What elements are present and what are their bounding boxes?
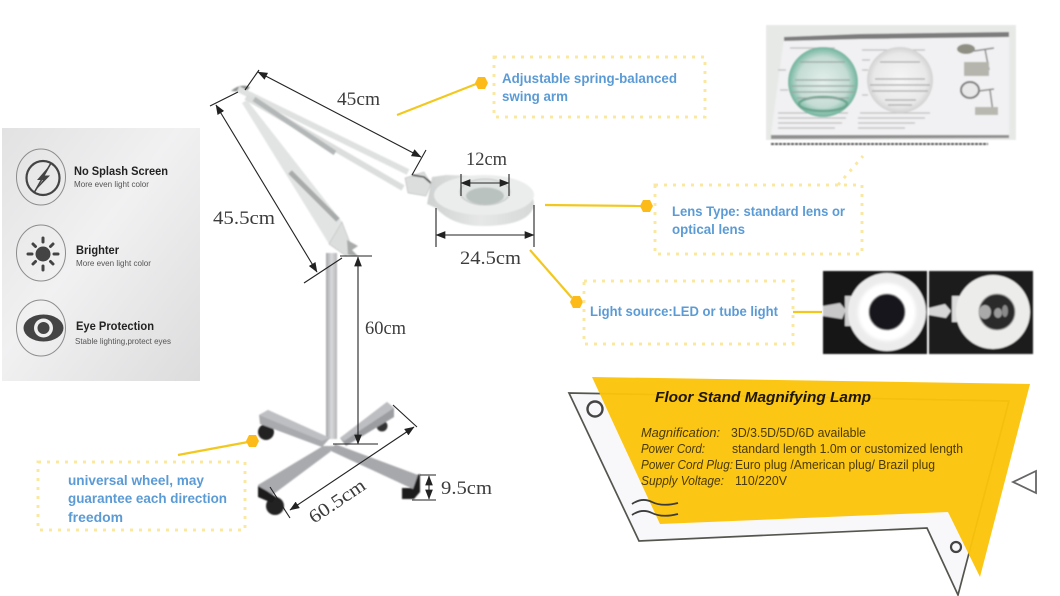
dimension: 45.5cm [210, 92, 342, 283]
manual thumbnails [957, 44, 998, 115]
dimension: 60.5cm [270, 405, 417, 528]
dimension: 45cm: 45cm [337, 89, 380, 110]
dimension: 60cm [333, 256, 406, 444]
spec list: 3D/3.5D/5D/6D available [731, 426, 866, 440]
feature: eye protection: Stable lighting,protect eyes [75, 336, 171, 346]
spec list: Power Cord Plug: [641, 458, 733, 472]
dimension: 9.5cm: 9.5cm [441, 478, 492, 499]
callout: universal wheel: universal wheel, may [68, 472, 204, 488]
callout: universal wheel: guarantee each direction [68, 490, 227, 506]
spec list: Euro plug /American plug/ Brazil plug [735, 458, 935, 472]
cross base with wheels [258, 402, 420, 515]
feature: no splash screen: More even light color [74, 179, 149, 189]
callout: swing arm: swing arm [502, 88, 568, 104]
callout: lens type: optical lens [672, 221, 745, 237]
callout: lens type [545, 156, 863, 254]
dimension: 12cm [461, 149, 509, 196]
photo: LED and tube light [823, 271, 1033, 354]
callout: light source [530, 250, 822, 344]
callout: lens type: Lens Type: standard lens or [672, 203, 846, 219]
photo: lens manual comparison [766, 25, 1016, 144]
feature: brighter: More even light color [76, 258, 151, 268]
dimension: 60.5cm: 60.5cm [305, 475, 370, 528]
spec list: Supply Voltage: [641, 474, 724, 488]
spec list: 110/220V [735, 474, 788, 488]
panel: product specs [569, 377, 1036, 595]
feature: brighter [16, 225, 151, 281]
dimension: 60cm: 60cm [365, 318, 406, 339]
callout: swing arm [397, 57, 705, 117]
feature: no splash screen: No Splash Screen [74, 166, 168, 178]
dimension: 45.5cm: 45.5cm [213, 208, 275, 229]
magnifier ring head [427, 175, 534, 226]
spec list: Power Cord: [641, 442, 705, 456]
callout: universal wheel [38, 435, 259, 530]
dimension: 9.5cm [412, 475, 492, 500]
feature: no splash screen [16, 149, 168, 205]
lamp arms [231, 86, 432, 256]
spec list: standard length 1.0m or customized length [732, 442, 963, 456]
feature: brighter: Brighter [76, 245, 119, 257]
feature: eye protection [16, 300, 171, 356]
spec list: Magnification: [641, 426, 720, 440]
callout: swing arm: Adjustable spring-balanced [502, 70, 677, 86]
floor stand lamp illustration [231, 86, 534, 515]
dimension: 24.5cm [436, 205, 534, 269]
dimension: 45cm [245, 70, 426, 175]
panel: lamp features [2, 128, 200, 381]
spec list [641, 426, 963, 488]
specs title: Floor Stand Magnifying Lamp [655, 389, 871, 406]
callout: universal wheel: freedom [68, 509, 123, 525]
pole [326, 253, 337, 439]
feature: eye protection: Eye Protection [76, 321, 154, 333]
callout: light source: Light source:LED or tube light [590, 303, 778, 319]
dimension: 12cm: 12cm [466, 149, 507, 170]
dimension: 24.5cm: 24.5cm [460, 248, 521, 269]
